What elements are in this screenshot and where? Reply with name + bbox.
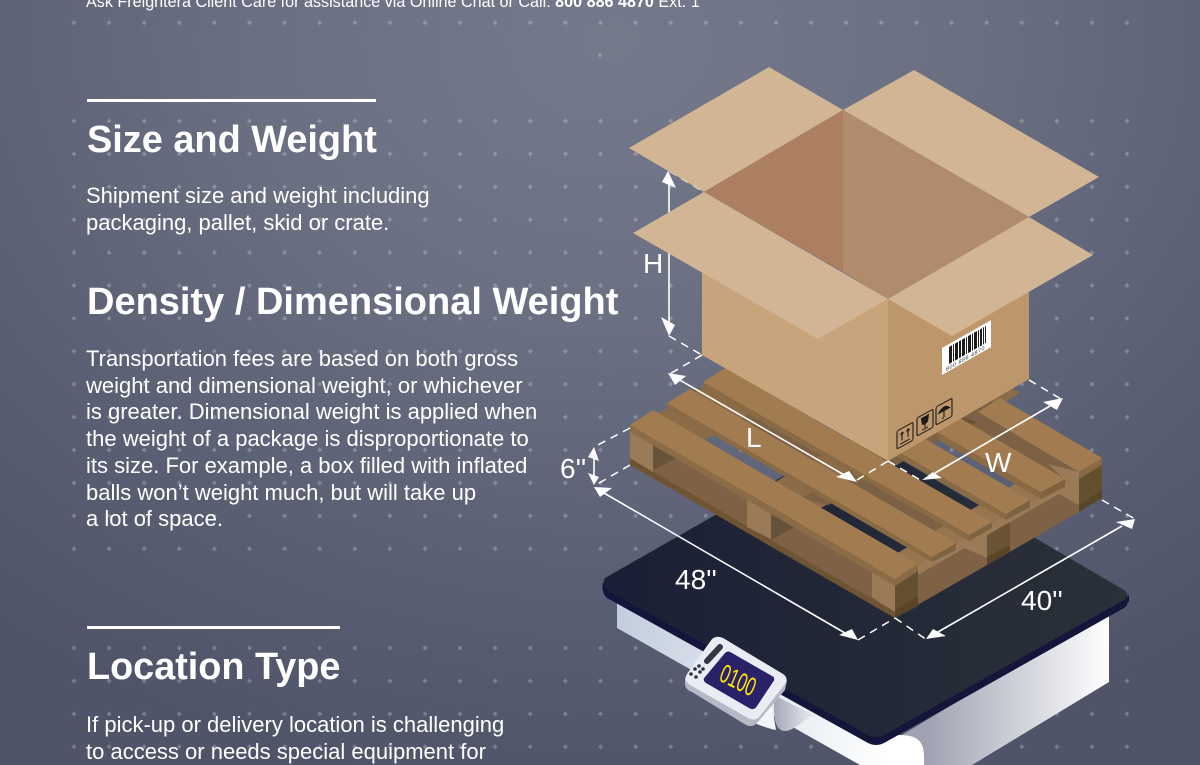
section: density and dimensional weight bbox=[86, 281, 618, 531]
pallet bbox=[630, 312, 1102, 618]
barcode label bbox=[942, 320, 991, 375]
dimension: length bbox=[668, 355, 888, 482]
pallet back gap bbox=[960, 412, 1079, 479]
pallet right end block faces bbox=[1048, 467, 1079, 505]
text: density description bbox=[86, 346, 537, 531]
text: size and weight description: Shipment size and weight including bbox=[86, 183, 430, 208]
dimension: pallet height bbox=[588, 428, 630, 486]
dimension labels: W bbox=[985, 447, 1012, 478]
box front flaps bbox=[633, 192, 1093, 339]
scale neck bbox=[774, 695, 813, 731]
scale base right side bbox=[902, 610, 1109, 765]
dimension: width bbox=[888, 380, 1063, 481]
text: density description: the weight of a package is disproportionate to bbox=[86, 426, 529, 451]
display body side bbox=[685, 678, 787, 726]
text: density description: weight and dimensional weight, or whichever bbox=[86, 373, 523, 398]
text: density description: is greater. Dimensional weight is applied when bbox=[86, 399, 537, 424]
pallet right lower deck bbox=[895, 472, 1079, 618]
section: size and weight bbox=[86, 99, 430, 235]
display slot bbox=[707, 647, 720, 661]
display body bbox=[686, 637, 787, 720]
heading: location type: Location Type bbox=[87, 646, 340, 688]
scale top surface bbox=[603, 436, 1128, 737]
dimension labels bbox=[560, 248, 1063, 616]
text: location description: If pick-up or delivery location is challenging bbox=[86, 712, 504, 737]
display tail bbox=[752, 706, 776, 730]
text: density description: a lot of space. bbox=[86, 506, 223, 531]
display screen bbox=[704, 652, 774, 709]
dimension: 40 inches bbox=[895, 500, 1135, 640]
scale platform bbox=[602, 436, 1129, 765]
text: location description bbox=[86, 712, 504, 764]
dimension labels: 40'' bbox=[1021, 585, 1063, 616]
dimension labels: 6'' bbox=[560, 453, 586, 484]
scale display bbox=[685, 637, 787, 730]
heading rule bbox=[87, 626, 340, 629]
scale top underside bbox=[603, 444, 1128, 745]
display keypad bbox=[689, 664, 705, 679]
dimension labels: 48'' bbox=[675, 564, 717, 595]
text: density description: Transportation fees are based on both gross bbox=[86, 346, 518, 371]
text: size and weight description bbox=[86, 183, 430, 235]
box interior bbox=[704, 110, 1029, 299]
text: size and weight description: packaging, pallet, skid or crate. bbox=[86, 210, 389, 235]
dimension: 48 inches bbox=[594, 487, 895, 640]
box faces bbox=[702, 192, 1029, 461]
display readout: 0100 bbox=[716, 658, 760, 702]
text: density description: its size. For example, a box filled with inflated bbox=[86, 453, 527, 478]
text: density description: balls won’t weight much, but will take up bbox=[86, 480, 476, 505]
heading: size and weight: Size and Weight bbox=[87, 119, 377, 161]
text: location description: to access or needs special equipment for bbox=[86, 739, 486, 764]
scale base left side bbox=[617, 600, 924, 765]
pallet slats bbox=[978, 398, 1102, 472]
handling icons bbox=[897, 398, 952, 449]
barcode label: 800 886 4870 bbox=[946, 345, 985, 373]
section: location type bbox=[86, 626, 504, 764]
heading rule bbox=[87, 99, 376, 102]
pallet front side bbox=[630, 432, 895, 618]
box back flaps bbox=[629, 67, 1099, 217]
pallet corner block bbox=[895, 571, 918, 612]
dimension labels: H bbox=[643, 248, 663, 279]
icon: fragile glass bbox=[917, 409, 933, 436]
height arrow bbox=[661, 171, 704, 355]
dimension labels: L bbox=[746, 422, 762, 453]
heading: density: Density / Dimensional Weight bbox=[87, 281, 618, 323]
icon: keep dry umbrella bbox=[936, 398, 952, 425]
pallet inner gap shade bbox=[690, 388, 969, 543]
pallet stringers bbox=[634, 312, 880, 454]
icon: this way up bbox=[897, 422, 913, 449]
